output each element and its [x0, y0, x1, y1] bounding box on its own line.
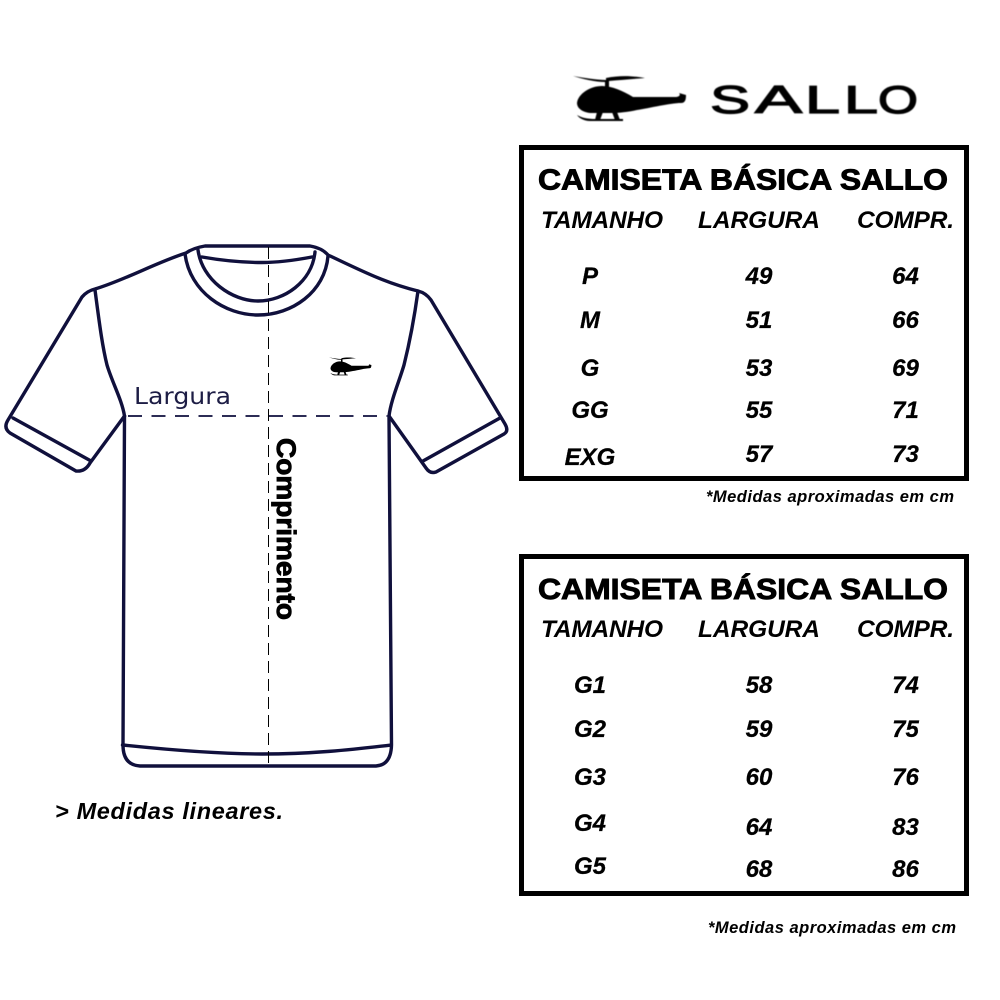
table rows: GG	[571, 397, 609, 424]
column headers: LARGURA	[698, 616, 820, 643]
table rows: 74	[892, 672, 919, 699]
icon: chest helicopter	[329, 357, 371, 375]
column headers: COMPR.	[857, 616, 954, 643]
table rows: 59	[746, 716, 773, 743]
table rows: 76	[892, 764, 919, 791]
table rows: 49	[745, 263, 773, 290]
table rows: 58	[746, 672, 773, 699]
panel: size table 2	[522, 556, 966, 894]
column headers	[541, 616, 954, 643]
footnote 2: *Medidas aproximadas em cm	[708, 919, 956, 937]
table rows: 83	[892, 814, 919, 841]
brand logo	[573, 76, 918, 122]
table rows: 73	[892, 441, 919, 468]
table rows: G2	[574, 716, 607, 743]
table title: CAMISETA BÁSICA SALLO	[538, 572, 948, 606]
table rows: 75	[892, 716, 919, 743]
t-shirt outline	[6, 246, 507, 766]
note: linear measurements: > Medidas lineares.	[55, 798, 283, 824]
table rows	[565, 263, 919, 471]
column headers: TAMANHO	[541, 207, 663, 234]
t-shirt diagram	[6, 246, 507, 766]
column headers: COMPR.	[857, 207, 954, 234]
table rows: 53	[746, 355, 773, 382]
table rows: 55	[746, 397, 773, 424]
footnote 1: *Medidas aproximadas em cm	[706, 488, 954, 506]
wordmark: SALLO: O	[878, 79, 918, 122]
table rows: M	[580, 307, 601, 334]
table rows: 86	[892, 856, 919, 883]
label: Comprimento: Comprimento	[271, 438, 301, 620]
wordmark: SALLO: A	[755, 79, 802, 122]
table rows: 66	[892, 307, 919, 334]
table rows: G3	[574, 764, 607, 791]
table rows	[574, 672, 919, 883]
table rows: P	[582, 263, 599, 290]
table rows: G1	[574, 672, 606, 699]
table rows: 68	[746, 856, 773, 883]
wordmark: SALLO: L	[805, 79, 840, 122]
table rows: 57	[746, 441, 774, 468]
table rows: 60	[746, 764, 773, 791]
table frame	[522, 148, 966, 478]
column headers	[541, 207, 954, 234]
table rows: 51	[746, 307, 772, 334]
table rows: G4	[574, 810, 606, 837]
column headers: LARGURA	[698, 207, 820, 234]
column headers: TAMANHO	[541, 616, 663, 643]
table rows: EXG	[565, 444, 615, 471]
table rows: G5	[574, 853, 607, 880]
table rows: G	[581, 355, 599, 382]
wordmark: SALLO: L	[844, 79, 878, 122]
icon: helicopter	[573, 76, 686, 121]
table frame	[522, 556, 966, 894]
panel: size table 1	[522, 148, 966, 478]
table rows: 71	[892, 397, 919, 424]
width measure line	[128, 415, 388, 417]
table rows: 69	[892, 355, 919, 382]
table rows: 64	[892, 263, 919, 290]
label: Largura: Largura	[134, 384, 231, 410]
length measure line	[268, 247, 270, 765]
wordmark: SALLO: S	[710, 79, 750, 122]
table title: CAMISETA BÁSICA SALLO	[538, 162, 948, 196]
table rows: 64	[746, 814, 772, 841]
